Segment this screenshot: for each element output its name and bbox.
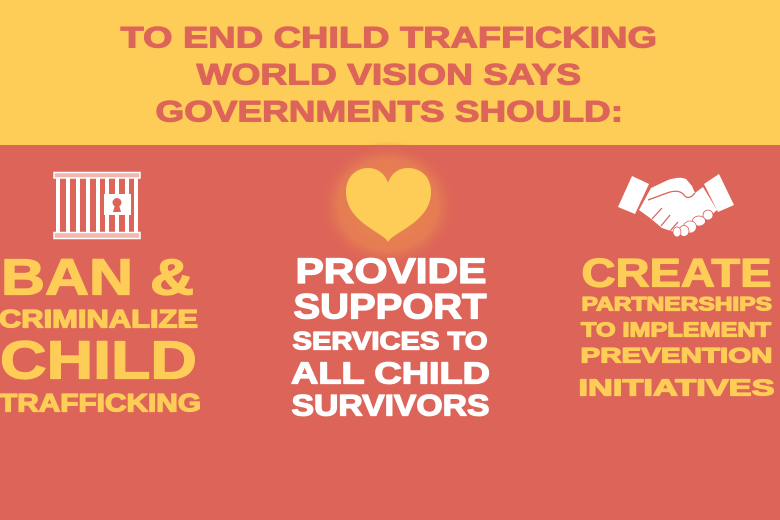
right text block: PARTNERSHIPS	[582, 294, 772, 316]
center text block	[291, 252, 490, 422]
title: WORLD VISION SAYS	[196, 58, 581, 92]
right text block: INITIATIVES	[578, 374, 774, 400]
header banner	[0, 0, 780, 145]
left text block: CRIMINALIZE	[0, 306, 198, 334]
panel: ban and criminalize	[0, 172, 201, 418]
right text block: PREVENTION	[580, 344, 772, 368]
title: TO END CHILD TRAFFICKING	[120, 22, 657, 54]
center text block: ALL CHILD	[291, 356, 490, 390]
center text block: SURVIVORS	[292, 390, 490, 422]
panel: create partnerships	[578, 174, 774, 400]
title	[120, 22, 657, 128]
center text block: PROVIDE	[296, 252, 486, 291]
left text block: CHILD	[0, 330, 197, 390]
right text block: TO IMPLEMENT	[581, 320, 771, 342]
icon: glowing heart	[318, 141, 458, 269]
icon: handshake	[618, 174, 734, 237]
title: GOVERNMENTS SHOULD:	[156, 96, 623, 128]
left text block: TRAFFICKING	[0, 390, 201, 418]
center text block: SERVICES TO	[292, 328, 488, 356]
panel: provide support	[291, 141, 490, 422]
right text block: CREATE	[582, 252, 772, 296]
left text block	[0, 248, 201, 418]
icon: prison bars with lock	[54, 172, 140, 238]
center text block: SUPPORT	[294, 288, 486, 326]
left text block: BAN &	[1, 248, 194, 306]
right text block	[578, 252, 774, 400]
